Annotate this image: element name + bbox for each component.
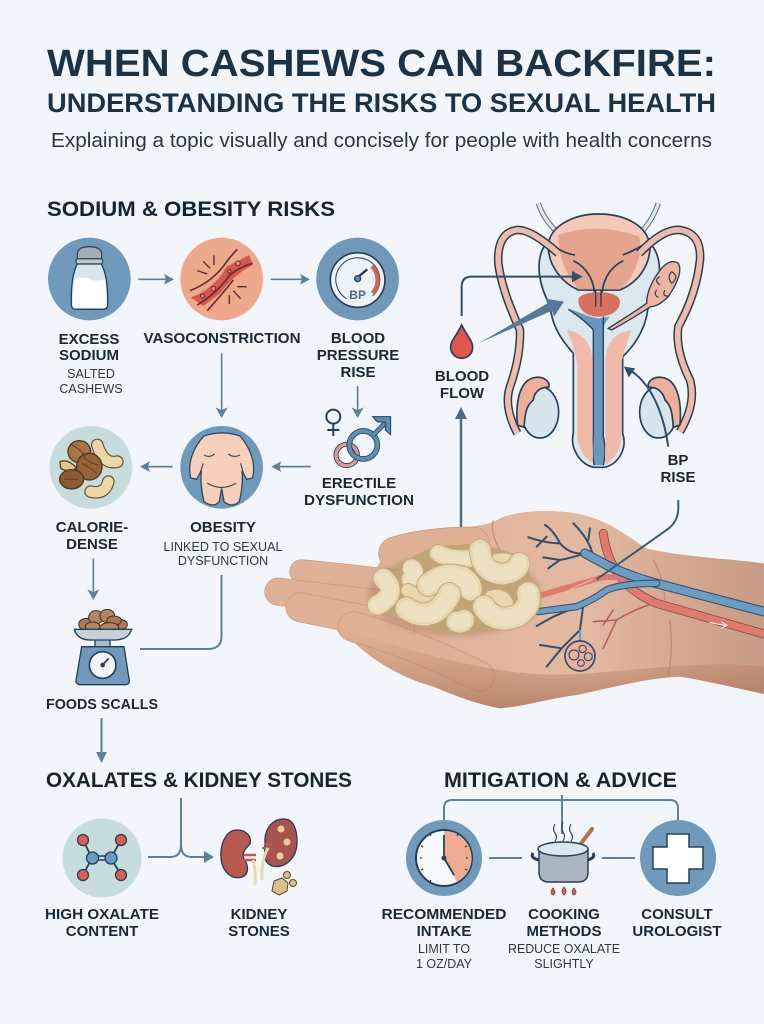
label: recommended intake: RECOMMENDED [382, 906, 507, 923]
arrow: oxalate to kidney stones [148, 798, 214, 863]
label: erectile dysfunction: ERECTILE [322, 475, 396, 492]
label: erectile dysfunction: DYSFUNCTION [304, 492, 414, 509]
icon: blood pressure gauge: BP [349, 288, 366, 302]
label: excess sodium: EXCESS [59, 331, 119, 348]
label: obesity: LINKED TO SEXUAL [164, 540, 283, 554]
icon: salt shaker [48, 238, 131, 320]
label: kidney stones: KIDNEY [231, 906, 287, 923]
label: bp rise [660, 452, 696, 486]
label: kidney stones: STONES [228, 923, 290, 940]
label: recommended intake: LIMIT TO [418, 942, 470, 956]
label: cooking methods: COOKING [528, 906, 600, 923]
icon: gender symbols [326, 410, 391, 466]
palm and wrist [327, 511, 764, 708]
label: vasoconstriction: VASOCONSTRICTION [144, 330, 300, 347]
label: blood flow: FLOW [440, 385, 485, 402]
diagram: male urogenital anatomy [451, 203, 700, 467]
label: recommended intake [382, 906, 507, 971]
label: consult urologist: UROLOGIST [632, 923, 722, 940]
label: consult urologist [632, 906, 722, 940]
arrow: hand up to blood flow [455, 407, 467, 537]
label: kidney stones [228, 906, 290, 940]
label: cooking methods [508, 906, 620, 971]
title: WHEN CASHEWS CAN BACKFIRE: [47, 43, 716, 85]
icon: constricted blood vessel [180, 238, 263, 320]
connector: bp rise to hand vein [597, 500, 678, 579]
arrow: obesity to calorie-dense [140, 461, 173, 472]
connector: pot to cross [602, 857, 635, 859]
arrow: blood flow to bladder [462, 271, 583, 316]
heading: sodium and obesity risks: SODIUM & OBESITY RISKS [47, 198, 335, 221]
label: blood flow: BLOOD [435, 368, 489, 385]
connector: clock to pot [489, 857, 522, 859]
cashew shadow [368, 553, 542, 637]
panel: mitigation and advice [382, 769, 722, 971]
subtitle: Explaining a topic visually and concisely for people with health concerns [51, 130, 712, 152]
arrow: thick blood flow [480, 299, 564, 343]
label: excess sodium: SODIUM [59, 347, 119, 364]
icon: blood drop [451, 325, 473, 358]
label: excess sodium: CASHEWS [59, 382, 123, 396]
icon: clock [406, 820, 482, 896]
label: cooking methods: SLIGHTLY [534, 957, 594, 971]
label: recommended intake: INTAKE [417, 923, 471, 940]
label: obesity: DYSFUNCTION [178, 554, 268, 568]
label: cooking methods: REDUCE OXALATE [508, 942, 620, 956]
veins [528, 523, 764, 667]
label: excess sodium [59, 331, 123, 396]
arrow: bp rise [624, 367, 668, 447]
icon: blood pressure gauge [316, 238, 399, 320]
label: bp rise: BP [668, 452, 688, 469]
icon: food scale [74, 609, 132, 685]
label: blood pressure rise [317, 330, 399, 381]
label: calorie-dense: DENSE [66, 536, 118, 553]
panel: oxalates and kidney stones [45, 769, 352, 940]
label: high oxalate content: CONTENT [66, 923, 138, 940]
heading: mitigation and advice: MITIGATION & ADVICE [444, 769, 677, 792]
icon: mixed nuts [50, 426, 132, 509]
heading: oxalates and kidney stones: OXALATES & KIDNEY STONES [46, 769, 352, 792]
icon: oxalate molecule [62, 818, 142, 898]
panel: sodium and obesity risks [46, 198, 414, 763]
cashews [373, 543, 537, 633]
title [47, 43, 716, 118]
title: UNDERSTANDING THE RISKS TO SEXUAL HEALTH [47, 88, 716, 118]
label: high oxalate content [45, 906, 159, 940]
icon: obesity torso [180, 426, 263, 509]
arrow: blood pressure to erectile dysfunction [352, 386, 364, 418]
label: bp rise: RISE [660, 469, 696, 486]
label: calorie-dense [56, 519, 128, 553]
label: blood pressure rise: RISE [340, 364, 376, 381]
icon: vein cross-section [565, 630, 595, 671]
label: blood pressure rise: BLOOD [331, 330, 385, 347]
label: calorie-dense: CALORIE- [56, 519, 128, 536]
arrow: sodium to vasoconstriction [138, 274, 174, 285]
label: obesity: OBESITY [190, 519, 256, 536]
arrow: vasoconstriction to blood pressure [271, 274, 310, 285]
label: erectile dysfunction [304, 475, 414, 509]
label: foods scalls: FOODS SCALLS [46, 696, 158, 713]
label: obesity [164, 519, 283, 568]
icon: medical cross [640, 820, 716, 896]
label: cooking methods: METHODS [526, 923, 602, 940]
arrow: food scale to oxalates [96, 718, 107, 763]
fingers [278, 543, 480, 677]
label: blood pressure rise: PRESSURE [317, 347, 399, 364]
icon: kidneys with stones [221, 819, 297, 895]
arrow: vasoconstriction to obesity [216, 353, 228, 418]
label: blood flow [435, 368, 489, 402]
arrow: erectile dysfunction to obesity [271, 461, 311, 472]
label: high oxalate content: HIGH OXALATE [45, 906, 159, 923]
illustration: hand holding cashews with veins [278, 500, 764, 708]
connector: obesity to food scale [140, 575, 222, 649]
connector: bracket [444, 795, 678, 834]
icon: cooking pot [532, 822, 594, 895]
arrow: calorie-dense to food scale [87, 558, 99, 600]
label: excess sodium: SALTED [67, 367, 115, 381]
label: recommended intake: 1 OZ/DAY [416, 957, 473, 971]
label: consult urologist: CONSULT [641, 906, 713, 923]
